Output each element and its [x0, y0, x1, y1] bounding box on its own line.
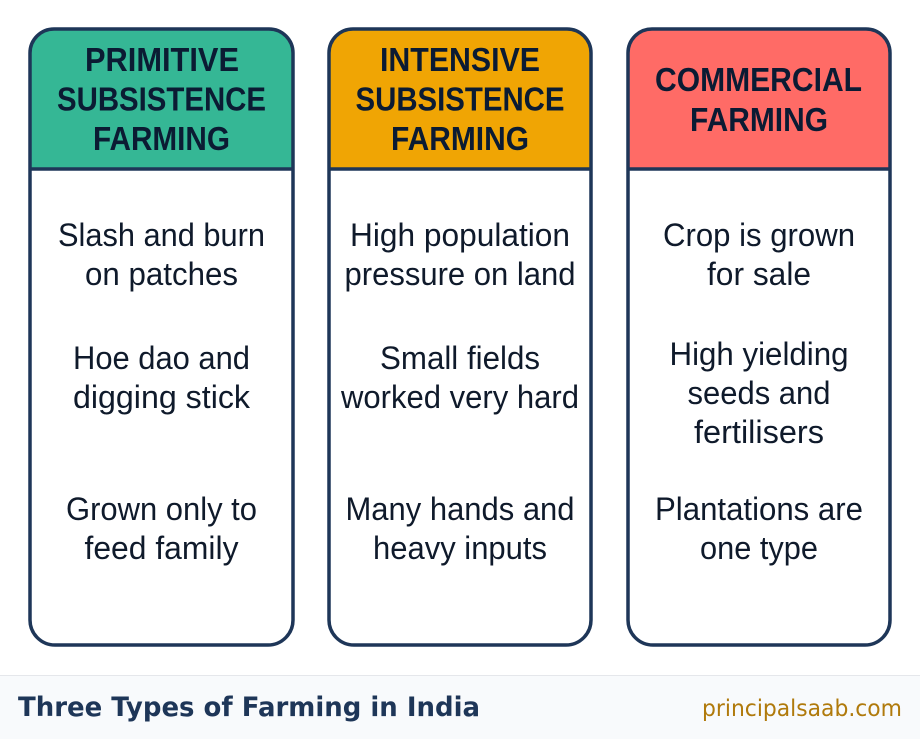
text: high population pressure — [344, 217, 576, 292]
panel: commercial farming — [628, 29, 890, 645]
text: plantations — [655, 491, 863, 566]
header band: primitive — [30, 29, 293, 169]
text: high yielding seeds: fertilisers — [694, 414, 824, 450]
text: grown only to feed family: feed family — [84, 530, 238, 566]
text: high population pressure: High population — [350, 217, 570, 253]
heading: commercial farming: COMMERCIAL — [655, 61, 862, 98]
text: plantations: one type — [700, 530, 818, 566]
text: plantations: Plantations are — [655, 491, 863, 527]
text: slash and burn — [58, 217, 265, 292]
heading: intensive subsistence farming: INTENSIVE — [380, 41, 540, 78]
heading: intensive subsistence farming: SUBSISTENCE — [356, 80, 564, 118]
text: many hands — [346, 491, 574, 566]
panel outline: commercial — [628, 29, 890, 645]
footer site name: principalsaab.com — [702, 696, 902, 722]
heading: primitive subsistence farming: SUBSISTENCE — [57, 80, 266, 118]
heading: primitive subsistence farming: PRIMITIVE — [85, 41, 239, 78]
heading: commercial farming: FARMING — [690, 101, 828, 138]
text: crop for sale — [663, 217, 855, 292]
panel outline: intensive — [329, 29, 591, 645]
text: slash and burn: Slash and burn — [58, 217, 265, 253]
text: hoe dao — [73, 340, 251, 415]
text: high yielding seeds — [670, 336, 848, 450]
text: high population pressure: pressure on land — [344, 256, 576, 292]
text: slash and burn: on patches — [85, 256, 238, 292]
text: high yielding seeds: High yielding — [670, 336, 848, 372]
panel: primitive subsistence farming — [30, 29, 293, 645]
text: small fields: Small fields — [380, 340, 540, 376]
footer title: Three Types of Farming in India — [18, 692, 480, 723]
footer bar — [0, 675, 920, 739]
text: small fields: worked very hard — [340, 379, 579, 415]
text: small fields — [340, 340, 579, 415]
heading: commercial farming — [655, 61, 862, 138]
heading: intensive subsistence farming: FARMING — [391, 120, 529, 157]
panel: intensive subsistence farming — [329, 29, 591, 645]
panel outline: primitive — [30, 29, 293, 645]
heading: primitive subsistence farming: FARMING — [93, 120, 230, 157]
text: grown only to feed family: Grown only to — [66, 491, 257, 527]
text: many hands: Many hands and — [346, 491, 574, 527]
header band: intensive — [329, 29, 591, 169]
text: crop for sale: Crop is grown — [663, 217, 855, 253]
header band: commercial — [628, 29, 890, 169]
text: crop for sale: for sale — [707, 256, 811, 292]
text: high yielding seeds: seeds and — [688, 375, 830, 411]
heading: primitive subsistence farming — [57, 41, 266, 157]
text: hoe dao: Hoe dao and — [73, 340, 250, 376]
text: grown only to feed family — [66, 491, 257, 566]
text: hoe dao: digging stick — [73, 379, 251, 415]
heading: intensive subsistence farming — [356, 41, 564, 157]
text: many hands: heavy inputs — [373, 530, 547, 566]
